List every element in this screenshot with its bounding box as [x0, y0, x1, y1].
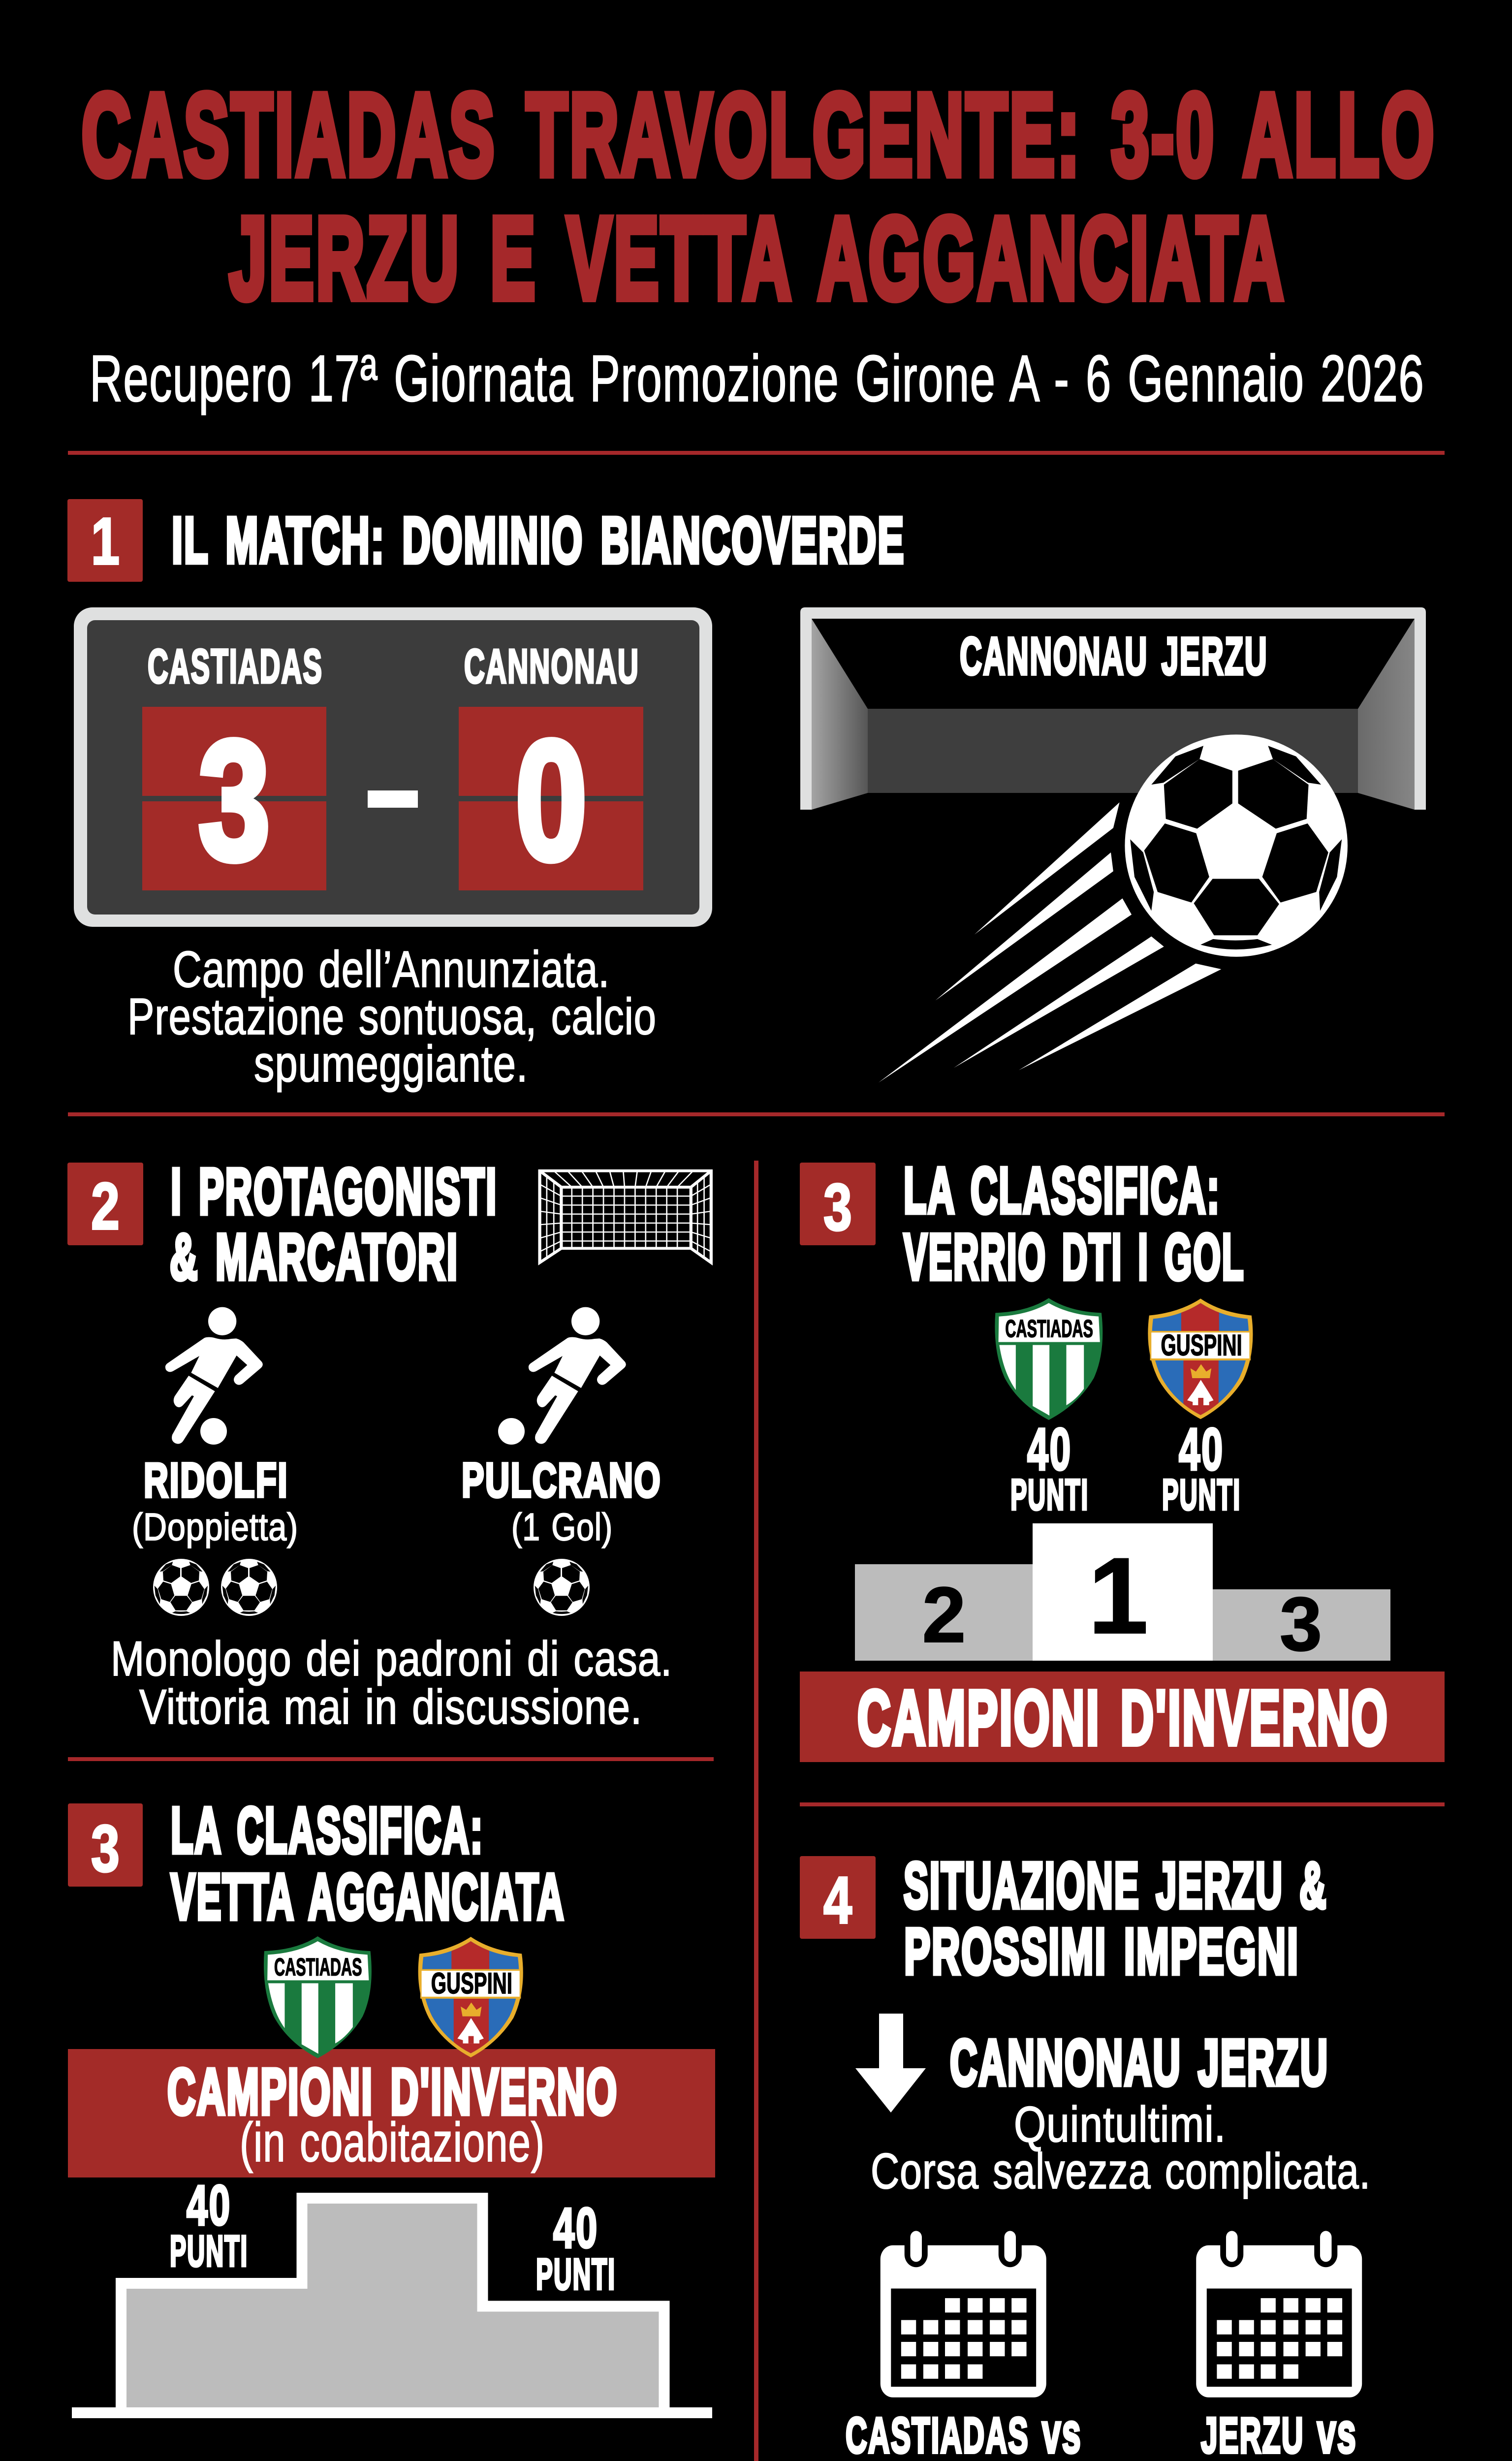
panel: protagonisti e marcatori: [67, 1155, 711, 1734]
points: guspini: 40: [1179, 1416, 1224, 1483]
section badge 3 right: [800, 1163, 876, 1245]
next match: jerzu vs uta: [1121, 2231, 1436, 2461]
heading: vetta agganciata: LA CLASSIFICA:: [171, 1794, 484, 1866]
points: castiadas: PUNTI: [1010, 1470, 1089, 1519]
podium 1 2 3: 3: [1280, 1581, 1322, 1667]
icon: player left: [165, 1307, 263, 1445]
points: guspini: 40: [553, 2197, 598, 2260]
goal with team name: CANNONAU JERZU: [960, 626, 1268, 686]
podium 1 2 3: [855, 1523, 1390, 1667]
jerzu description: Corsa salvezza complicata.: [871, 2143, 1371, 2199]
points: guspini: [1162, 1416, 1241, 1519]
banner: campioni d'inverno: CAMPIONI D'INVERNO: [167, 2055, 618, 2128]
match description: Prestazione sontuosa, calcio: [127, 988, 657, 1045]
points: castiadas: 40: [187, 2174, 231, 2237]
icon: calendar: [881, 2231, 1046, 2398]
banner: campioni d'inverno: (in coabitazione): [240, 2112, 545, 2173]
heading: protagonisti: & MARCATORI: [170, 1221, 459, 1293]
points: guspini: PUNTI: [536, 2249, 616, 2299]
section badge 4: [800, 1856, 876, 1939]
jerzu description: Quintultimi.: [1014, 2096, 1226, 2152]
section badge 2: [67, 1163, 143, 1245]
panel: classifica, verrio dti i gol: [800, 1154, 1445, 1762]
heading: protagonisti: I PROTAGONISTI: [171, 1155, 498, 1228]
heading: vetta agganciata: [171, 1794, 565, 1933]
podium 1 2 3: 1: [1088, 1535, 1148, 1656]
goals: two balls: [153, 1559, 277, 1616]
points: guspini: [536, 2197, 616, 2299]
crest: castiadas: [264, 1936, 372, 2058]
name: ridolfi: RIDOLFI: [144, 1453, 288, 1507]
protagonisti description: [111, 1631, 672, 1734]
match label: jerzu: [1121, 2401, 1436, 2461]
section badge 3: [68, 1803, 143, 1887]
podium outline: [72, 2198, 712, 2418]
crest: guspini: GUSPINI: [431, 1967, 512, 2000]
crest: guspini: [418, 1937, 523, 2057]
panel: il match: [67, 499, 1426, 1093]
player: ridolfi: [132, 1307, 298, 1616]
section badge 3: 3: [91, 1811, 120, 1886]
points: castiadas: PUNTI: [170, 2226, 248, 2275]
panel: situazione jerzu e prossimi impegni: [800, 1849, 1436, 2461]
name: pulcrano: PULCRANO: [462, 1453, 662, 1507]
scoreboard: 3: [198, 706, 270, 895]
goals: one ball: [534, 1559, 590, 1616]
next match: castiadas vs arborea: [846, 2231, 1082, 2461]
heading: situazione jerzu: [904, 1849, 1327, 1988]
heading: il match: IL MATCH: DOMINIO BIANCOVERDE: [172, 504, 905, 576]
player: pulcrano: [462, 1307, 662, 1616]
scoreboard: CASTIADAS: [148, 639, 323, 693]
points: guspini: PUNTI: [1162, 1470, 1241, 1519]
section badge 4: 4: [823, 1863, 852, 1937]
crest: castiadas: [995, 1298, 1102, 1420]
note: doppietta: (Doppietta): [132, 1505, 298, 1548]
title: [82, 70, 1436, 323]
heading: protagonisti: [170, 1155, 498, 1293]
goal with team name: [800, 607, 1426, 810]
heading: classifica right: LA CLASSIFICA:: [904, 1154, 1221, 1227]
section badge 3 right: 3: [823, 1170, 852, 1244]
scoreboard: CANNONAU: [464, 639, 639, 693]
protagonisti description: Vittoria mai in discussione.: [139, 1679, 642, 1734]
points: castiadas: 40: [1027, 1416, 1072, 1483]
icon: player right: [498, 1307, 626, 1445]
note: 1 gol: (1 Gol): [511, 1505, 613, 1548]
protagonisti description: Monologo dei padroni di casa.: [111, 1631, 672, 1686]
section badge 1: [67, 499, 143, 582]
match description: Campo dell’Annunziata.: [173, 941, 610, 998]
scoreboard: [74, 607, 712, 927]
scoreboard: 0: [515, 706, 587, 895]
match description: spumeggiante.: [254, 1036, 528, 1093]
crest: guspini: [1148, 1298, 1253, 1419]
icon: down arrow: [855, 2014, 926, 2113]
points: castiadas: [1010, 1416, 1089, 1519]
icon: soccer ball with motion streaks: [879, 734, 1348, 1082]
crest: castiadas: CASTIADAS: [274, 1954, 362, 1981]
banner: campioni d'inverno: [68, 2049, 715, 2177]
icon: goal net: [540, 1171, 711, 1262]
heading: classifica right: VERRIO DTI I GOL: [904, 1221, 1245, 1293]
match description: [127, 941, 657, 1093]
crest: guspini: GUSPINI: [1161, 1329, 1242, 1362]
crest: castiadas: CASTIADAS: [1005, 1315, 1093, 1343]
jerzu description: [871, 2096, 1371, 2199]
section badge 2: 2: [91, 1169, 120, 1243]
podium 1 2 3: 2: [922, 1571, 966, 1659]
heading: vetta agganciata: VETTA AGGANCIATA: [171, 1861, 565, 1933]
section badge 1: 1: [91, 504, 120, 578]
heading: classifica right: [904, 1154, 1245, 1293]
points: castiadas: [170, 2174, 248, 2275]
icon: calendar: [1196, 2231, 1362, 2398]
panel: classifica, vetta agganciata: [68, 1794, 715, 2461]
